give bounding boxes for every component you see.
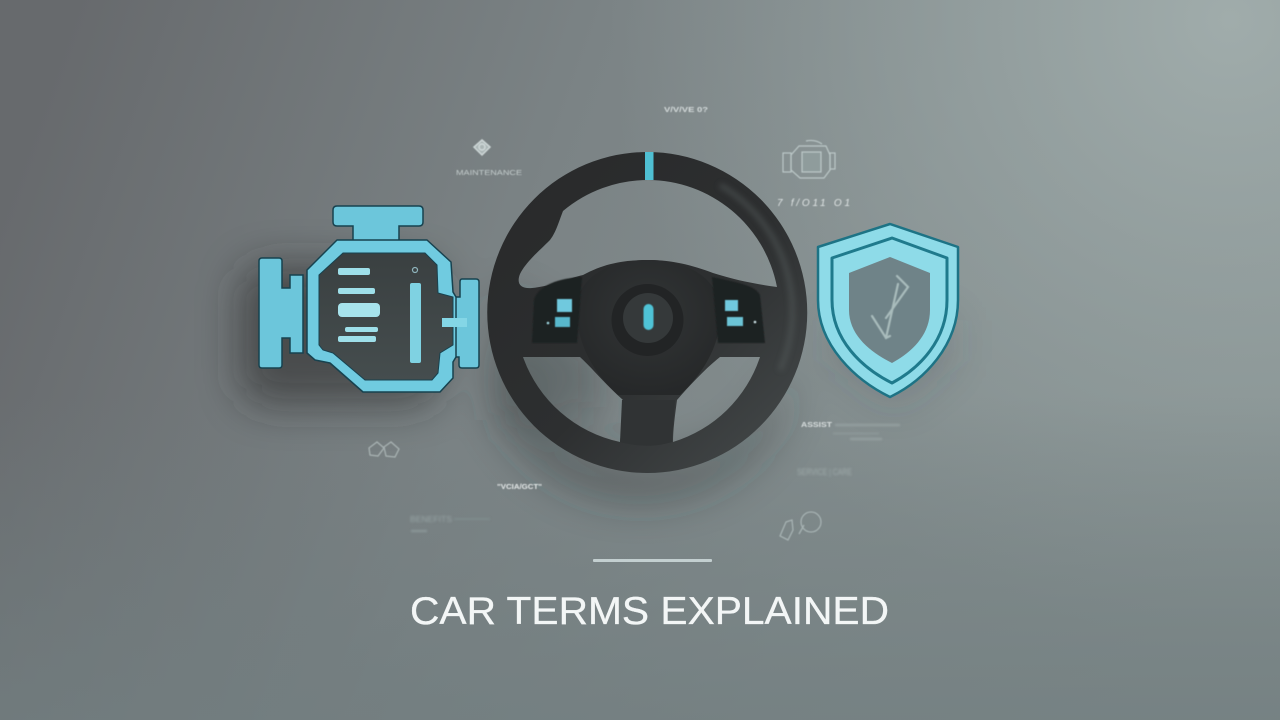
hub button	[623, 293, 673, 343]
icon shadows	[240, 265, 950, 500]
engine icon	[259, 206, 479, 392]
hub cyan indicator	[644, 304, 654, 330]
shield icon	[818, 224, 958, 397]
small engine icon top right	[783, 140, 835, 178]
small label top left: MAINTENANCE	[456, 170, 522, 177]
left switch pod	[532, 277, 582, 343]
wheel rim and spokes	[487, 152, 807, 473]
faint label right: SERVICE | CARE	[797, 467, 852, 477]
shield check	[872, 276, 908, 338]
right buttons	[725, 300, 756, 326]
faint lines lower right	[833, 424, 900, 440]
engine text lines	[338, 268, 421, 363]
rim highlight	[720, 185, 792, 370]
small label top: V/V/VE 0?	[664, 107, 708, 114]
engine window	[319, 253, 453, 380]
small icons lower right	[780, 512, 821, 540]
left buttons	[547, 299, 572, 327]
faint label lower left	[410, 515, 490, 532]
wheel hub	[577, 260, 721, 395]
small label lower right: ASSIST	[801, 422, 833, 429]
divider line	[593, 559, 712, 562]
shield outer	[818, 224, 958, 397]
small label lower left: "VCIA/GCT"	[497, 482, 542, 491]
hub ring	[612, 284, 684, 356]
right switch pod	[712, 277, 765, 343]
shield center	[849, 257, 930, 363]
small icon lower left	[369, 442, 399, 457]
wheel stem	[620, 400, 675, 446]
engine dot	[412, 268, 418, 272]
faint label lower left: BENEFITS	[410, 515, 452, 524]
steering wheel	[487, 152, 807, 473]
engine body	[307, 240, 456, 392]
engine cap	[333, 206, 423, 241]
small icon top left	[474, 140, 490, 155]
title: CAR TERMS EXPLAINED	[410, 590, 889, 633]
shield inner line	[832, 238, 947, 383]
engine right port	[442, 318, 467, 327]
rim marker	[645, 152, 654, 180]
engine right plate	[452, 279, 479, 368]
small label top right: 7 f/O11 O1	[777, 198, 850, 209]
engine left plate	[259, 258, 303, 368]
